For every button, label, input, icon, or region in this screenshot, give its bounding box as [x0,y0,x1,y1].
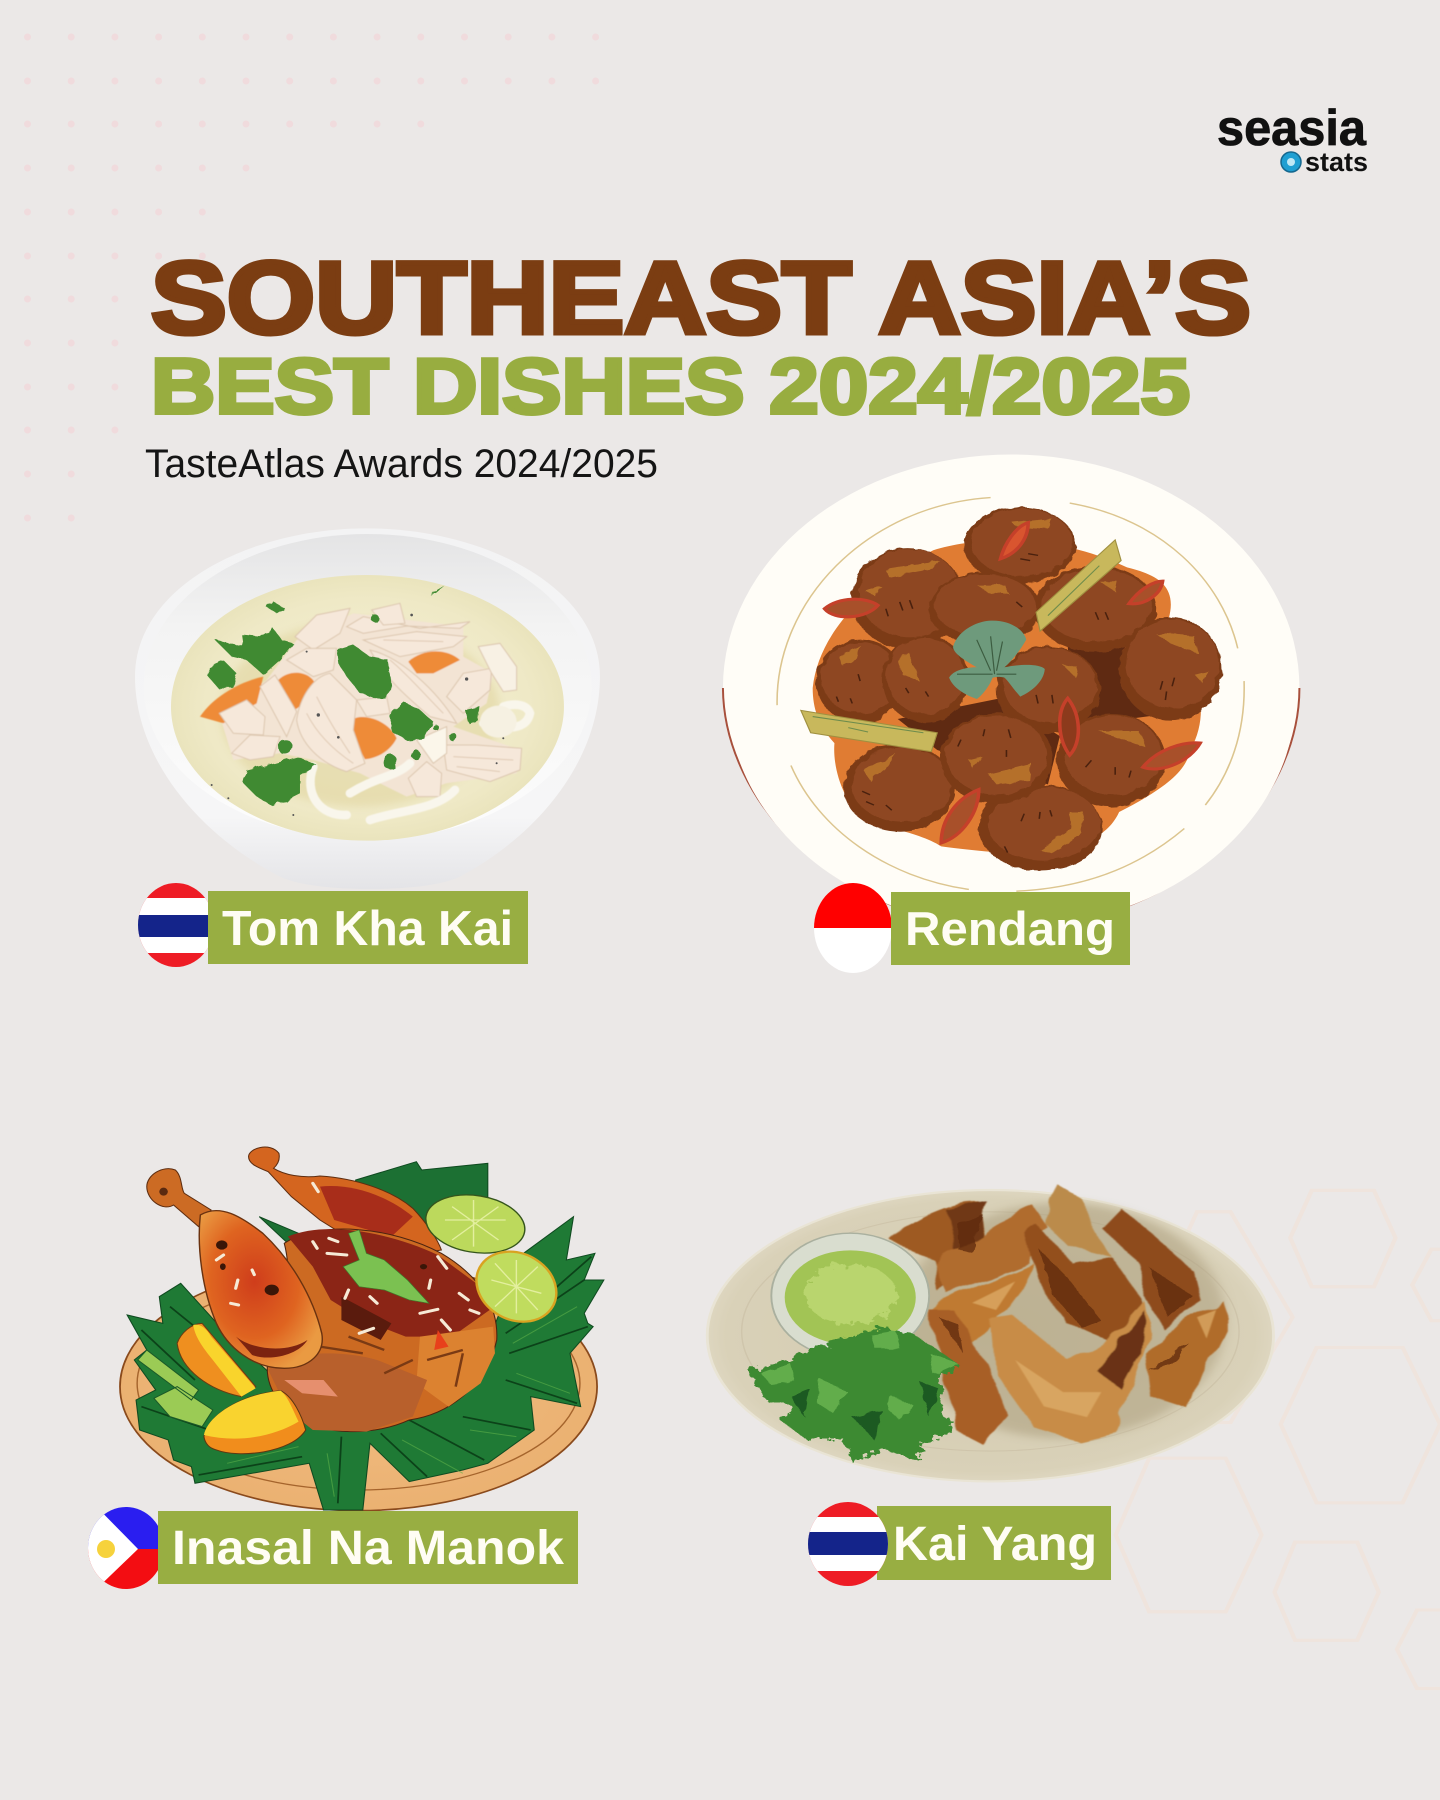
source line: TasteAtlas Awards 2024/2025 [145,442,658,486]
illustration: Kai Yang grilled wings [707,1183,1274,1481]
carrot slices [200,651,460,759]
pepper specks [211,614,504,816]
label: Kai Yang: Kai Yang [893,1518,1097,1571]
chicken fibre lines [307,640,513,772]
flag: Philippines [88,1507,158,1589]
subtitle: Best Dishes 2024/2025: BEST DISHES 2024/2025 [151,342,1190,430]
logo: seasia stats: seasia [1217,100,1367,156]
banana leaves [127,1162,604,1510]
label: Kai Yang [800,1500,1111,1590]
label: Tom Kha Kai [130,880,528,970]
decorative hexagon outlines [1116,1190,1440,1689]
back drumstick [249,1147,441,1260]
illustration: Inasal Na Manok grilled chicken [120,1147,604,1511]
gold ring segments [777,498,1244,891]
beef highlights [838,519,1208,853]
cilantro leaves [208,586,480,807]
decorative dot grid [24,34,599,522]
label: Inasal Na Manok [88,1507,578,1589]
label: Inasal Na Manok: Inasal Na Manok [172,1522,564,1575]
lime slices [421,1188,530,1260]
beef texture marks [836,554,1174,853]
flag: Thailand [808,1502,888,1586]
beef pieces [816,507,1222,870]
chicken base mass [220,613,520,797]
wings [891,1183,1223,1444]
logo: seasia stats: stats [1305,147,1368,177]
char marks and sesame [216,1240,427,1295]
flag: Thailand [138,883,208,967]
cilantro garnish [750,1328,960,1464]
lemongrass pieces [801,540,1121,752]
chicken pieces [219,603,522,797]
chili slices [825,523,1200,843]
flag: Indonesia [814,883,891,973]
citrus wedges [177,1323,256,1397]
front drumstick [147,1169,211,1227]
label: Tom Kha Kai: Tom Kha Kai [222,902,513,956]
wing char patches [939,1214,1192,1371]
pale mushroom curls [310,705,530,820]
cucumber [138,1350,213,1427]
title: Southeast Asia's: SOUTHEAST ASIA’S [151,241,1251,355]
chicken body [267,1229,497,1432]
label: Rendang [810,880,1130,978]
dipping sauce bowl [771,1233,929,1358]
sauce [813,540,1201,853]
cilantro leaf [949,621,1045,699]
illustration: Tom Kha Kai soup bowl [135,528,600,889]
orange slice in front [204,1391,306,1454]
label: Rendang: Rendang [905,902,1115,955]
plate shadow under wings [900,1203,1226,1439]
garnish leaf [343,1230,429,1303]
illustration: Rendang plate [723,454,1299,929]
